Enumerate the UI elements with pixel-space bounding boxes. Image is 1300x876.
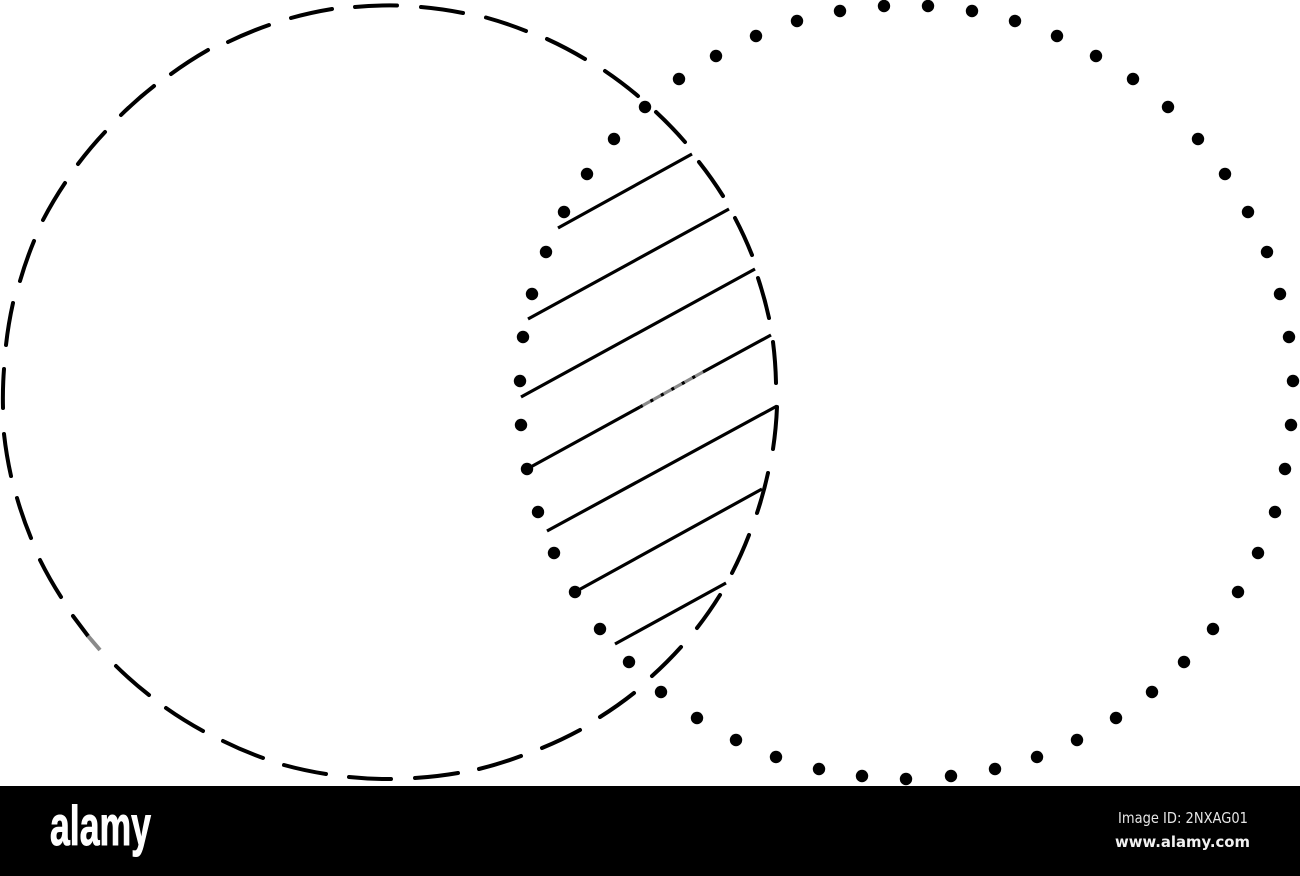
website: www.alamy.com [1115,833,1250,851]
right dotted circle [514,0,1299,785]
alamy logo: alamy [50,794,151,857]
image id: Image ID: 2NXAG01 [1118,809,1248,827]
footer bar [0,786,1300,876]
left dashed circle [3,5,777,779]
intersection hatch lines [521,154,777,644]
